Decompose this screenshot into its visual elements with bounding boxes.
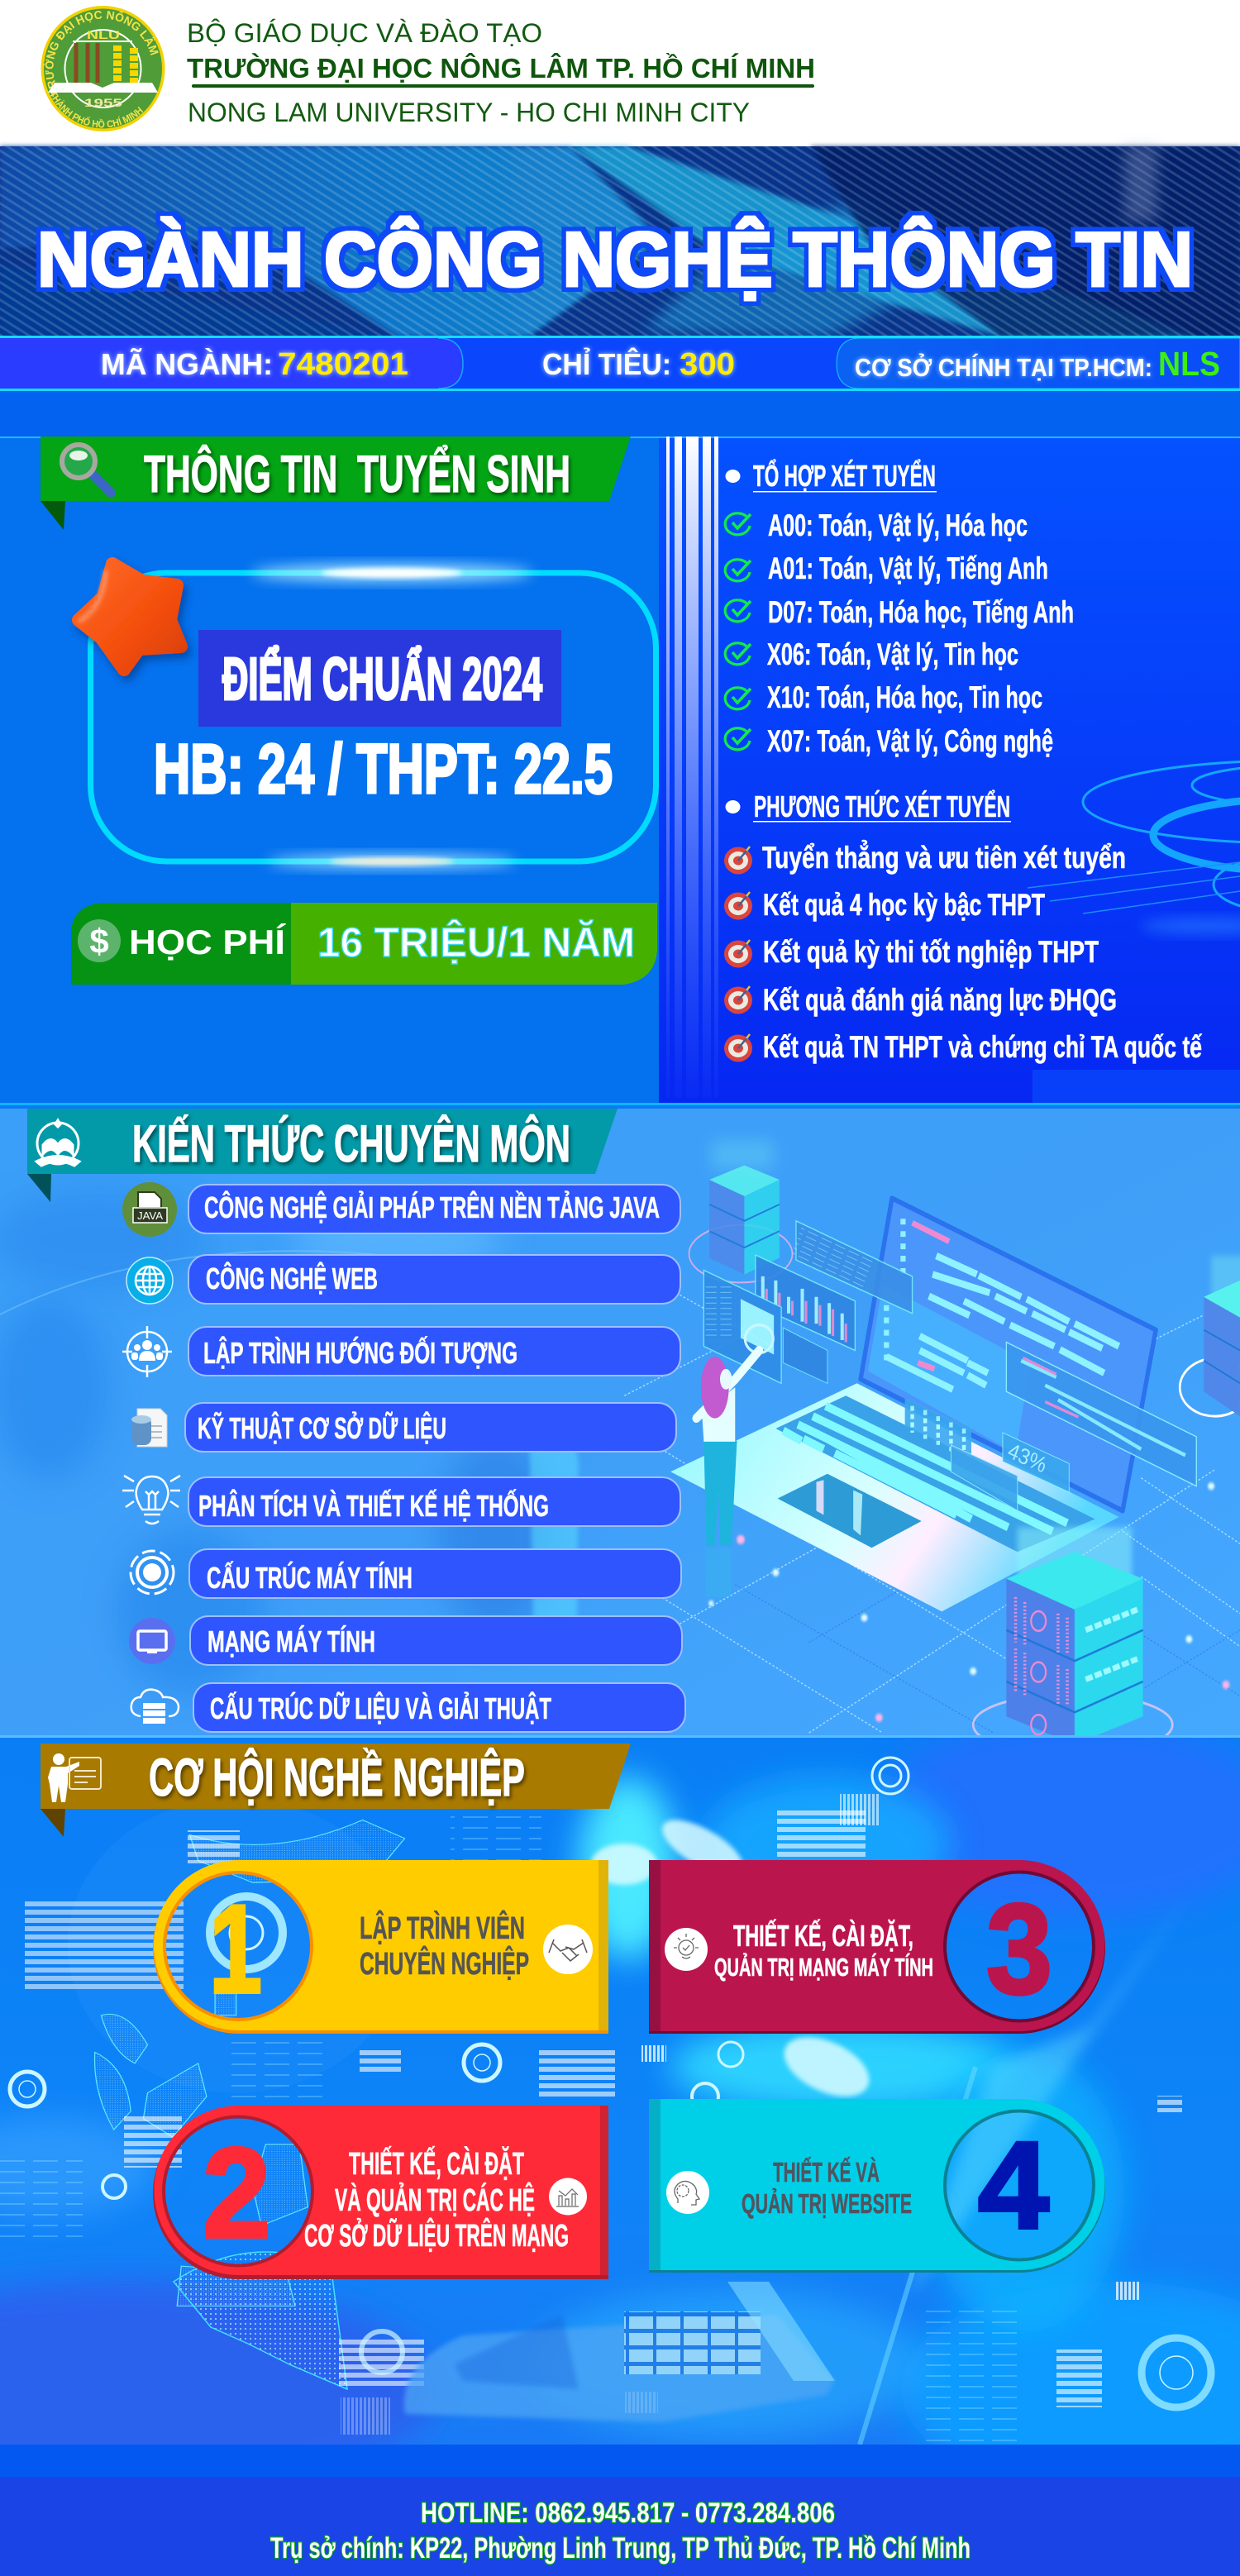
card 4: website admin: QUẢN TRỊ WEBSITE <box>742 2188 912 2219</box>
number 2: 2 <box>203 2121 270 2264</box>
laptop screen <box>861 1198 1156 1511</box>
item: database: KỸ THUẬT CƠ SỞ DỮ LIỆU <box>198 1410 446 1445</box>
heading: career: CƠ HỘI NGHỀ NGHIỆP <box>149 1747 525 1807</box>
panel: info bar: 7480201 <box>278 347 408 382</box>
text: university name: TRƯỜNG ĐẠI HỌC NÔNG LÂM TP. HỒ CHÍ MINH <box>187 52 815 83</box>
item: web: CÔNG NGHỆ WEB <box>206 1261 378 1295</box>
person <box>696 1350 759 1597</box>
heading: knowledge: KIẾN THỨC CHUYÊN MÔN <box>132 1114 570 1173</box>
title: NGÀNH CÔNG NGHỆ THÔNG TIN <box>37 216 1193 303</box>
illustration: isometric laptop <box>588 1141 1240 1756</box>
text: tuition value: 16 TRIỆU/1 NĂM <box>317 919 635 966</box>
number 1: 1 <box>209 1879 262 2020</box>
item: java: JAVA <box>137 1209 163 1222</box>
card 3: network admin: QUẢN TRỊ MẠNG MÁY TÍNH <box>714 1953 933 1982</box>
number 4: 4 <box>978 2116 1049 2254</box>
item: java: CÔNG NGHỆ GIẢI PHÁP TRÊN NỀN TẢNG JAVA <box>204 1190 660 1224</box>
section: combinations: A01: Toán, Vật lý, Tiếng Anh <box>768 551 1048 585</box>
score title box: ĐIỂM CHUẨN 2024 <box>222 646 542 713</box>
ribbon: admissions heading <box>41 436 631 530</box>
text: hotline: HOTLINE: 0862.945.817 - 0773.284.806 <box>421 2497 835 2529</box>
panel: spacer strip <box>0 391 1240 436</box>
icon: dollar: $ <box>89 922 109 961</box>
background: dial rings <box>10 1758 1211 2407</box>
icon: university logo <box>41 6 165 131</box>
heading: combinations: TỔ HỢP XÉT TUYỂN <box>753 457 936 493</box>
text: website admin: THIẾT KẾ VÀ <box>773 2157 880 2187</box>
panel: tuition <box>71 903 657 985</box>
card 4: website admin <box>649 2099 1105 2273</box>
text: database admin: THIẾT KẾ, CÀI ĐẶT <box>349 2145 524 2182</box>
icon: book badge <box>36 1120 79 1166</box>
server: top left <box>709 1141 780 1274</box>
number 3: 3 <box>986 1877 1052 2020</box>
card 1: programmer: CHUYÊN NGHIỆP <box>360 1945 529 1982</box>
section: admission methods <box>724 789 1202 1064</box>
strip below careers <box>0 2445 1240 2477</box>
item: architecture <box>131 1549 681 1598</box>
item: algorithms: CẤU TRÚC DỮ LIỆU VÀ GIẢI THUẬT <box>210 1691 551 1725</box>
server: bottom <box>973 1527 1172 1756</box>
ribbon: knowledge heading <box>27 1109 618 1202</box>
card 3: network admin <box>649 1860 1105 2034</box>
panel: info bar: 300 <box>680 347 735 382</box>
panel: admissions left <box>0 436 659 1104</box>
panel: benchmark score frame <box>79 564 656 869</box>
floating charts: 43% <box>1004 1438 1050 1478</box>
separator band <box>0 1103 1240 1109</box>
background: world map <box>68 1798 405 2306</box>
item: oop <box>122 1326 680 1377</box>
item: database <box>131 1403 676 1452</box>
panel: info bar <box>0 336 1240 391</box>
item: networks: MẠNG MÁY TÍNH <box>207 1624 375 1658</box>
section: combinations: X06: Toán, Vật lý, Tin học <box>767 637 1018 671</box>
card 1: programmer <box>153 1860 608 2034</box>
section: combinations: X10: Toán, Hóa học, Tin học <box>767 680 1042 714</box>
icon: chart <box>549 2178 587 2216</box>
item: analysis: PHÂN TÍCH VÀ THIẾT KẾ HỆ THỐNG <box>198 1488 549 1523</box>
section: admission methods: Kết quả kỳ thi tốt nghiệp THPT <box>763 935 1099 969</box>
panel: career opportunities <box>0 1720 1240 2497</box>
background: laptop keyboard <box>404 2067 975 2445</box>
section: admission methods: Kết quả đánh giá năng lực ĐHQG <box>763 983 1117 1017</box>
heading: admission info: THÔNG TIN TUYỂN SINH <box>144 445 570 503</box>
item: analysis <box>122 1476 680 1526</box>
text: quota: CHỈ TIÊU: <box>542 346 671 381</box>
text: program code: MÃ NGÀNH: <box>101 346 273 381</box>
card 2: database admin: CƠ SỞ DỮ LIỆU TRÊN MẠNG <box>304 2217 569 2254</box>
background: code text blocks <box>0 1815 1025 2447</box>
text: english name: NONG LAM UNIVERSITY - HO CHI MINH CITY <box>188 98 750 127</box>
icon: presenter <box>48 1753 101 1802</box>
background: data bars <box>25 1794 1182 2435</box>
item: oop: LẬP TRÌNH HƯỚNG ĐỐI TƯỢNG <box>203 1335 517 1370</box>
icon: star <box>79 564 181 670</box>
item: architecture: CẤU TRÚC MÁY TÍNH <box>207 1560 413 1595</box>
icon: head gear <box>666 2171 709 2214</box>
item: networks <box>129 1616 682 1665</box>
card 2: database admin <box>153 2106 608 2279</box>
laptop base <box>670 1383 1119 1611</box>
score title box <box>198 630 561 727</box>
panel: professional knowledge <box>0 1109 1240 1756</box>
item: algorithms <box>131 1683 685 1732</box>
icon: idea <box>665 1928 708 1971</box>
item: web <box>126 1255 680 1304</box>
icon: dollar <box>78 919 121 962</box>
card 2: database admin: VÀ QUẢN TRỊ CÁC HỆ <box>335 2182 535 2218</box>
panel: title banner <box>0 146 1240 336</box>
section: combinations <box>725 457 1074 758</box>
text: campus: CƠ SỞ CHÍNH TẠI TP.HCM: <box>855 352 1152 382</box>
text: ministry: BỘ GIÁO DỤC VÀ ĐÀO TẠO <box>187 18 542 48</box>
section: admission methods: Tuyển thẳng và ưu tiên xét tuyển <box>762 840 1126 875</box>
server: right <box>1180 1256 1240 1416</box>
text: address: Trụ sở chính: KP22, Phường Linh Trung, TP Thủ Đức, TP. Hồ Chí Minh <box>270 2532 971 2564</box>
section: combinations: D07: Toán, Hóa học, Tiếng Anh <box>768 595 1074 629</box>
ribbon: career heading <box>41 1744 631 1837</box>
icon: handshake <box>543 1925 593 1974</box>
text: network admin: THIẾT KẾ, CÀI ĐẶT, <box>733 1919 913 1953</box>
icon: university logo: TRƯỜNG ĐẠI HỌC NÔNG LÂM <box>43 11 159 98</box>
text: programmer: LẬP TRÌNH VIÊN <box>360 1910 525 1946</box>
text: scores: HB: 24 / THPT: 22.5 <box>154 730 613 808</box>
panel: info bar: NLS <box>1158 345 1220 383</box>
panel: footer <box>0 2477 1240 2576</box>
section: admission methods: Kết quả 4 học kỳ bậc THPT <box>763 888 1045 922</box>
background: hand pills <box>591 1809 879 2108</box>
floating charts <box>703 1221 1196 1511</box>
icon: university logo: 1955 <box>84 96 122 109</box>
section: combinations: X07: Toán, Vật lý, Công nghệ <box>767 724 1053 758</box>
list: knowledge items <box>122 1182 685 1732</box>
item: java <box>122 1182 680 1237</box>
panel: admissions right <box>659 436 1240 1104</box>
separator band <box>0 1735 1240 1739</box>
text: tuition label: HỌC PHÍ <box>129 923 286 961</box>
icon: university logo: THÀNH PHỐ HỒ CHÍ MINH <box>50 93 144 128</box>
section: combinations: A00: Toán, Vật lý, Hóa học <box>768 508 1028 542</box>
heading: methods: PHƯƠNG THỨC XÉT TUYỂN <box>754 789 1010 823</box>
icon: magnifier <box>62 445 111 493</box>
panel: header <box>0 0 1240 146</box>
icon: university logo: NLU <box>87 28 120 41</box>
